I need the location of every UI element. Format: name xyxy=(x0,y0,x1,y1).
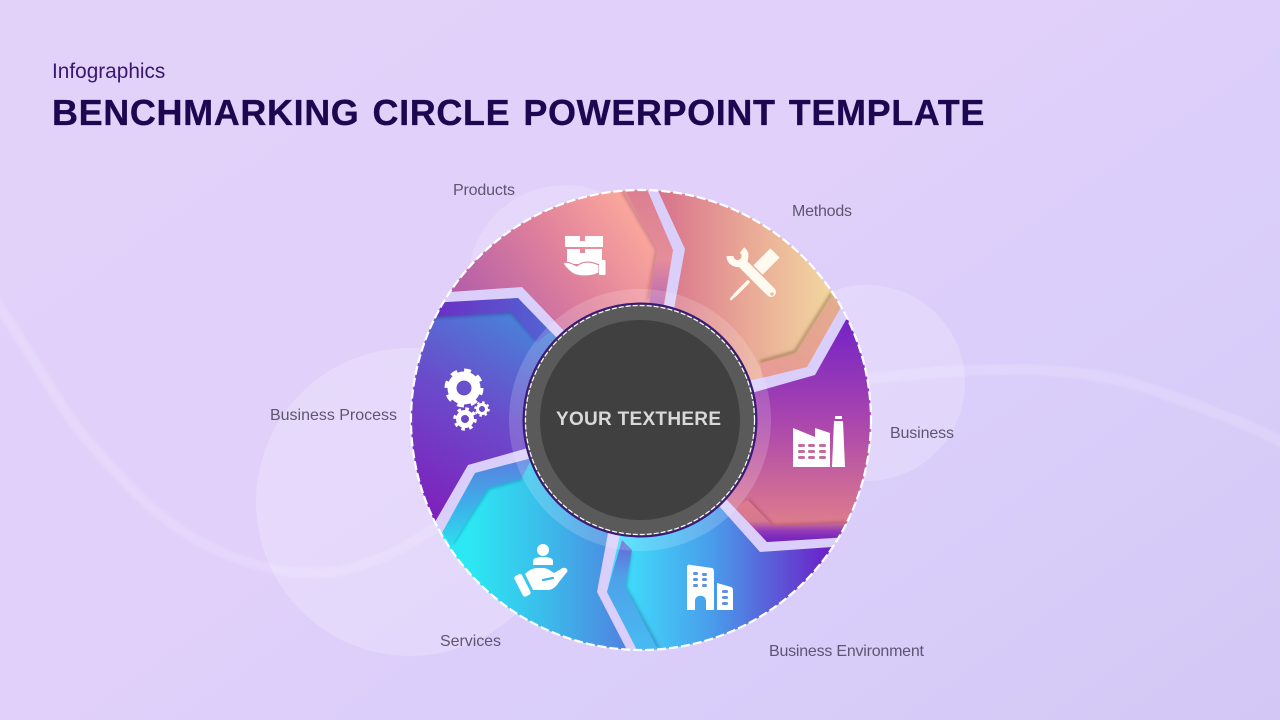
segment: products xyxy=(451,190,673,330)
segment: business environment xyxy=(607,506,832,650)
segment: services xyxy=(442,458,626,650)
hub text: YOUR TEXTHERE xyxy=(556,409,721,430)
segment: business process xyxy=(411,298,556,521)
subtitle: Infographics xyxy=(52,60,165,83)
icon: person on hand xyxy=(513,544,567,598)
label: products: Products xyxy=(453,182,515,199)
label: business: Business xyxy=(890,425,954,442)
dashed wheel outline xyxy=(411,190,871,650)
icon: gears xyxy=(447,371,488,429)
wheel base showing gaps xyxy=(411,190,871,650)
central hub xyxy=(524,304,756,536)
icon: office buildings xyxy=(687,565,733,610)
translucent ring around hub xyxy=(509,289,771,551)
label: services: Services xyxy=(440,633,501,650)
label: business environment: Business Environment xyxy=(769,643,925,660)
benchmarking wheel xyxy=(410,188,872,652)
icon: factory xyxy=(793,416,845,467)
decorative background circles and waves xyxy=(0,185,1280,656)
label: methods: Methods xyxy=(792,203,852,220)
icon: box in hand xyxy=(563,236,606,276)
title: BENCHMARKING CIRCLE POWERPOINT TEMPLATE xyxy=(52,92,985,133)
segment: methods xyxy=(658,190,840,380)
label: business process: Business Process xyxy=(270,407,397,424)
segment: business xyxy=(726,319,871,542)
icon: wrench and screwdriver xyxy=(730,250,775,299)
